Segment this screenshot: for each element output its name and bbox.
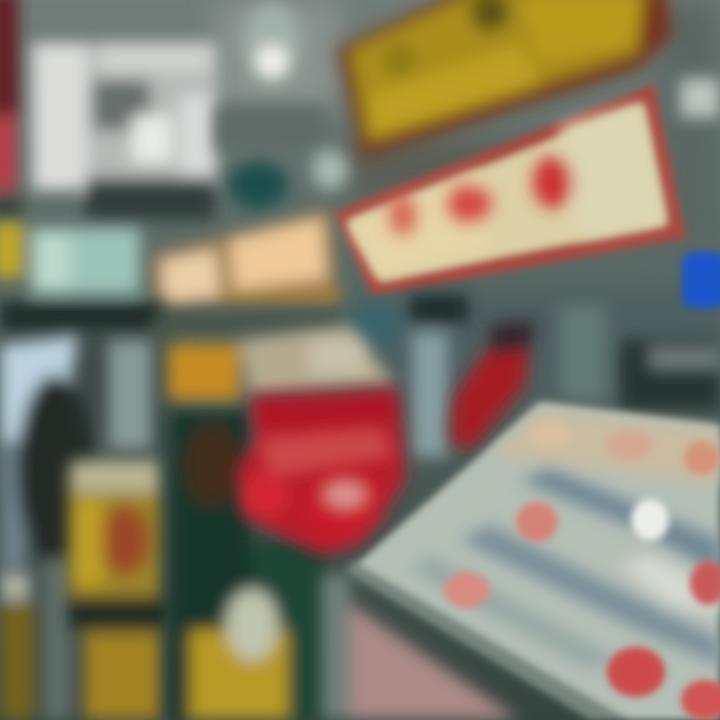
lit signs middle (150, 208, 340, 312)
red trimmed sign (334, 84, 686, 296)
yellow sign (338, 0, 672, 158)
dark red object (450, 320, 535, 450)
yellow cans (0, 460, 165, 720)
right blue light and dark shapes (682, 252, 720, 308)
ceiling lamp and dark teal shade (215, 2, 348, 209)
centre dark green and yellow bottles (170, 410, 325, 720)
floor (322, 575, 520, 720)
white posters top left (32, 42, 218, 220)
orange label and cream counter (168, 325, 395, 400)
red packages (236, 388, 405, 555)
left red strip (0, 0, 22, 220)
panel button rows (410, 410, 720, 670)
left pale window and dark figure (0, 335, 152, 720)
background patches (0, 0, 720, 463)
left yellow and pale teal panels (0, 222, 345, 334)
control panel (346, 402, 720, 720)
red dots on sign (348, 105, 664, 278)
right wall details (347, 78, 720, 457)
panel red buttons (444, 421, 720, 720)
